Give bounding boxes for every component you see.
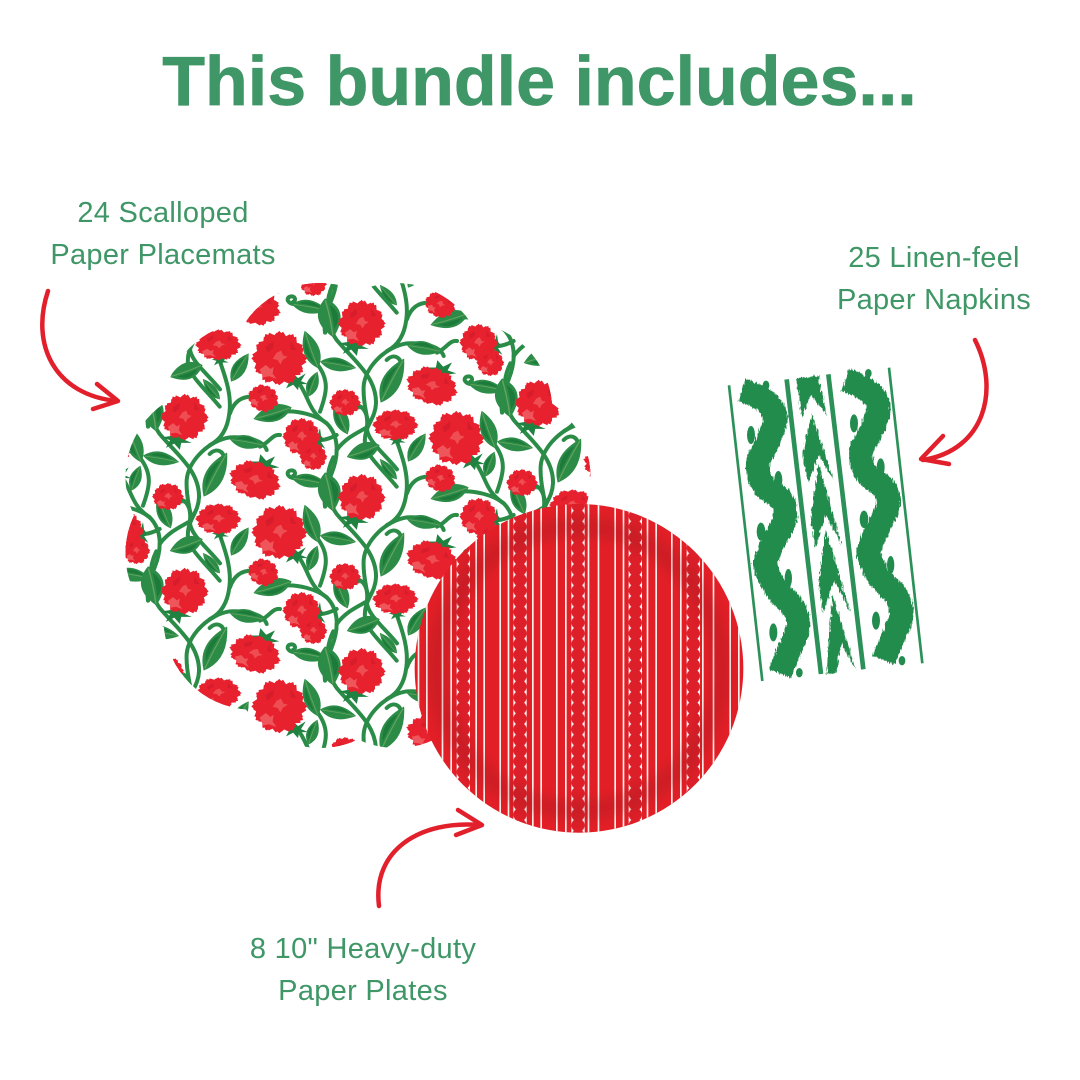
label: napkins: 25 Linen-feel bbox=[848, 242, 1020, 274]
label: napkins: Paper Napkins bbox=[837, 284, 1031, 316]
napkin dots bbox=[747, 369, 905, 677]
arrow: plates bbox=[378, 810, 482, 906]
plate beaded stripes bbox=[457, 500, 700, 840]
napkin border stripes bbox=[729, 368, 922, 681]
arrow: napkins bbox=[921, 340, 987, 464]
label: napkins bbox=[837, 242, 1031, 316]
title: This bundle includes... bbox=[162, 42, 917, 120]
label: plates bbox=[250, 933, 476, 1007]
label: placemats bbox=[50, 197, 276, 271]
plate thin white stripes bbox=[418, 500, 740, 840]
arrow: placemats bbox=[42, 291, 118, 409]
napkin chevrons bbox=[796, 376, 856, 674]
plate rim shadow bbox=[437, 527, 721, 810]
panel: striped paper plate bbox=[410, 500, 750, 840]
panel: scalloped placemat bbox=[126, 283, 924, 902]
label: plates: 8 10" Heavy-duty bbox=[250, 933, 476, 965]
label: placemats: 24 Scalloped bbox=[77, 197, 249, 229]
napkin zigzags bbox=[742, 380, 902, 673]
label: plates: Paper Plates bbox=[278, 975, 448, 1007]
panel: ikat paper napkin bbox=[729, 368, 922, 681]
label: placemats: Paper Placemats bbox=[50, 239, 276, 271]
